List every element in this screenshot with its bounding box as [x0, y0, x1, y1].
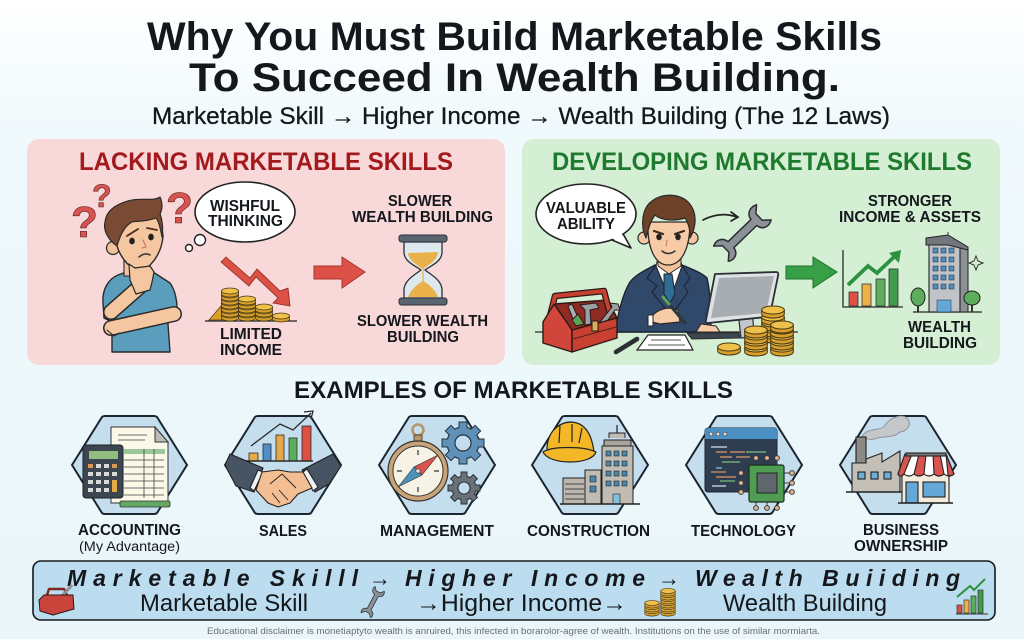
icon: question marks: ? [71, 198, 98, 247]
icon: professional at desk [615, 195, 720, 332]
callout: valuable ability: ABILITY [557, 216, 616, 233]
panel: developing marketable skills [522, 139, 1000, 365]
label: slower wealth building top [352, 193, 493, 226]
label: business ownership: OWNERSHIP [854, 538, 948, 555]
label: stronger income and assets: INCOME & ASSETS [839, 209, 981, 226]
label: wealth building [903, 319, 977, 352]
icon: code window [705, 428, 777, 492]
label: construction: CONSTRUCTION [527, 523, 650, 540]
icon: paper [637, 335, 693, 350]
disclaimer: Educational disclaimer is monetiaptyto wealth is anruired, this infected in borarolor-agree of wealth. Institutions on the use of similar mormiarta. [207, 626, 820, 637]
skill: technology [686, 416, 802, 540]
chart: sales bars [233, 411, 313, 461]
icon: mini chart [956, 579, 988, 614]
icon: question marks: ? [92, 178, 112, 214]
panel heading: lacking: LACKING MARKETABLE SKILLS [79, 148, 453, 176]
label: accounting: ACCOUNTING [78, 522, 181, 539]
skill: accounting [72, 416, 187, 554]
callout: wishful thinking: THINKING [208, 213, 283, 230]
callout: valuable ability: VALUABLE [546, 200, 626, 217]
icon: blue gear [442, 422, 484, 464]
icon: hard hat [543, 422, 596, 462]
icon: pen [616, 339, 637, 352]
label: wealth building: WEALTH [908, 319, 971, 336]
panel: lacking marketable skills [27, 139, 505, 365]
heading: examples: EXAMPLES OF MARKETABLE SKILLS [294, 377, 733, 404]
banner line one: → [369, 565, 391, 591]
label: management: MANAGEMENT [380, 523, 495, 540]
icon: storefront [898, 453, 954, 503]
icon: spreadsheet [111, 427, 170, 507]
label: slower wealth building top: SLOWER [388, 193, 452, 210]
icon: compass [388, 424, 448, 501]
label: accounting [78, 522, 181, 554]
icon: falling arrow [221, 257, 290, 306]
icon: wrench [713, 204, 772, 263]
label: slower wealth building top: WEALTH BUILDING [352, 209, 493, 226]
callout: valuable ability [536, 184, 636, 248]
panel heading: developing: DEVELOPING MARKETABLE SKILLS [552, 148, 972, 176]
icon: confused man [103, 197, 177, 352]
label: stronger income and assets [839, 193, 981, 226]
icon: microchip [739, 456, 794, 510]
icon: question marks [71, 178, 193, 247]
icon: mini wrench [360, 586, 385, 618]
label: accounting: (My Advantage) [79, 539, 180, 554]
icon: factory [846, 437, 902, 492]
skill: management [379, 416, 495, 540]
title: To Succeed In Wealth Building. [189, 56, 840, 100]
label: business ownership [854, 522, 948, 555]
label: slower wealth building bottom: SLOWER WEALTH [357, 313, 488, 330]
icon: city buildings [560, 425, 640, 504]
icon: monitor [687, 272, 778, 339]
icon: shrinking coins [205, 288, 297, 322]
label: stronger income and assets: STRONGER [868, 193, 952, 210]
label: sales: SALES [259, 523, 307, 540]
icon: desk line [535, 331, 798, 333]
icon: smoke [862, 416, 909, 439]
icon: coin stacks [718, 306, 793, 356]
callout: wishful thinking: WISHFUL [210, 198, 280, 215]
banner line one: Higher Income [405, 565, 645, 591]
banner line one [67, 565, 960, 591]
banner line two: income: →Higher Income→ [416, 590, 627, 617]
label: wealth building: BUILDING [903, 335, 977, 352]
banner line one: Wealth Buiiding [695, 565, 960, 591]
banner line one: Marketable Skilll [67, 565, 359, 591]
arrow: red [314, 257, 365, 288]
subtitle: Marketable Skill → Higher Income → Wealth Building (The 12 Laws) [152, 103, 890, 130]
label: slower wealth building bottom [357, 313, 488, 346]
chart: growth bars [843, 250, 903, 307]
callout: wishful thinking [186, 182, 295, 252]
label: limited income: LIMITED [220, 326, 282, 343]
icon: handshake [225, 454, 341, 507]
icon: hourglass [399, 235, 447, 305]
arrow: green [786, 257, 837, 288]
label: slower wealth building bottom: BUILDING [387, 329, 459, 346]
banner: formula strip [33, 561, 995, 620]
banner line two: skill: Marketable Skill [140, 590, 308, 617]
skill: sales [225, 411, 341, 540]
skill: construction [527, 416, 650, 540]
icon: question marks: ? [166, 184, 193, 233]
icon: gray gear [448, 472, 480, 504]
banner line one: → [658, 565, 680, 591]
icon: curved arrow [703, 212, 738, 221]
title: Why You Must Build Marketable Skills [147, 15, 882, 59]
label: business ownership: BUSINESS [863, 522, 939, 539]
label: limited income [220, 326, 282, 359]
banner line two: wealth: Wealth Building [723, 590, 887, 617]
icon: mini toolbox [39, 585, 74, 615]
label: limited income: INCOME [220, 342, 282, 359]
label: technology: TECHNOLOGY [691, 523, 797, 540]
title [147, 15, 882, 100]
icon: toolbox [543, 291, 620, 352]
icon: calculator [83, 445, 123, 498]
skill: business ownership [840, 416, 956, 555]
icon: office building with trees [911, 232, 983, 312]
icon: mini coins [645, 588, 675, 616]
